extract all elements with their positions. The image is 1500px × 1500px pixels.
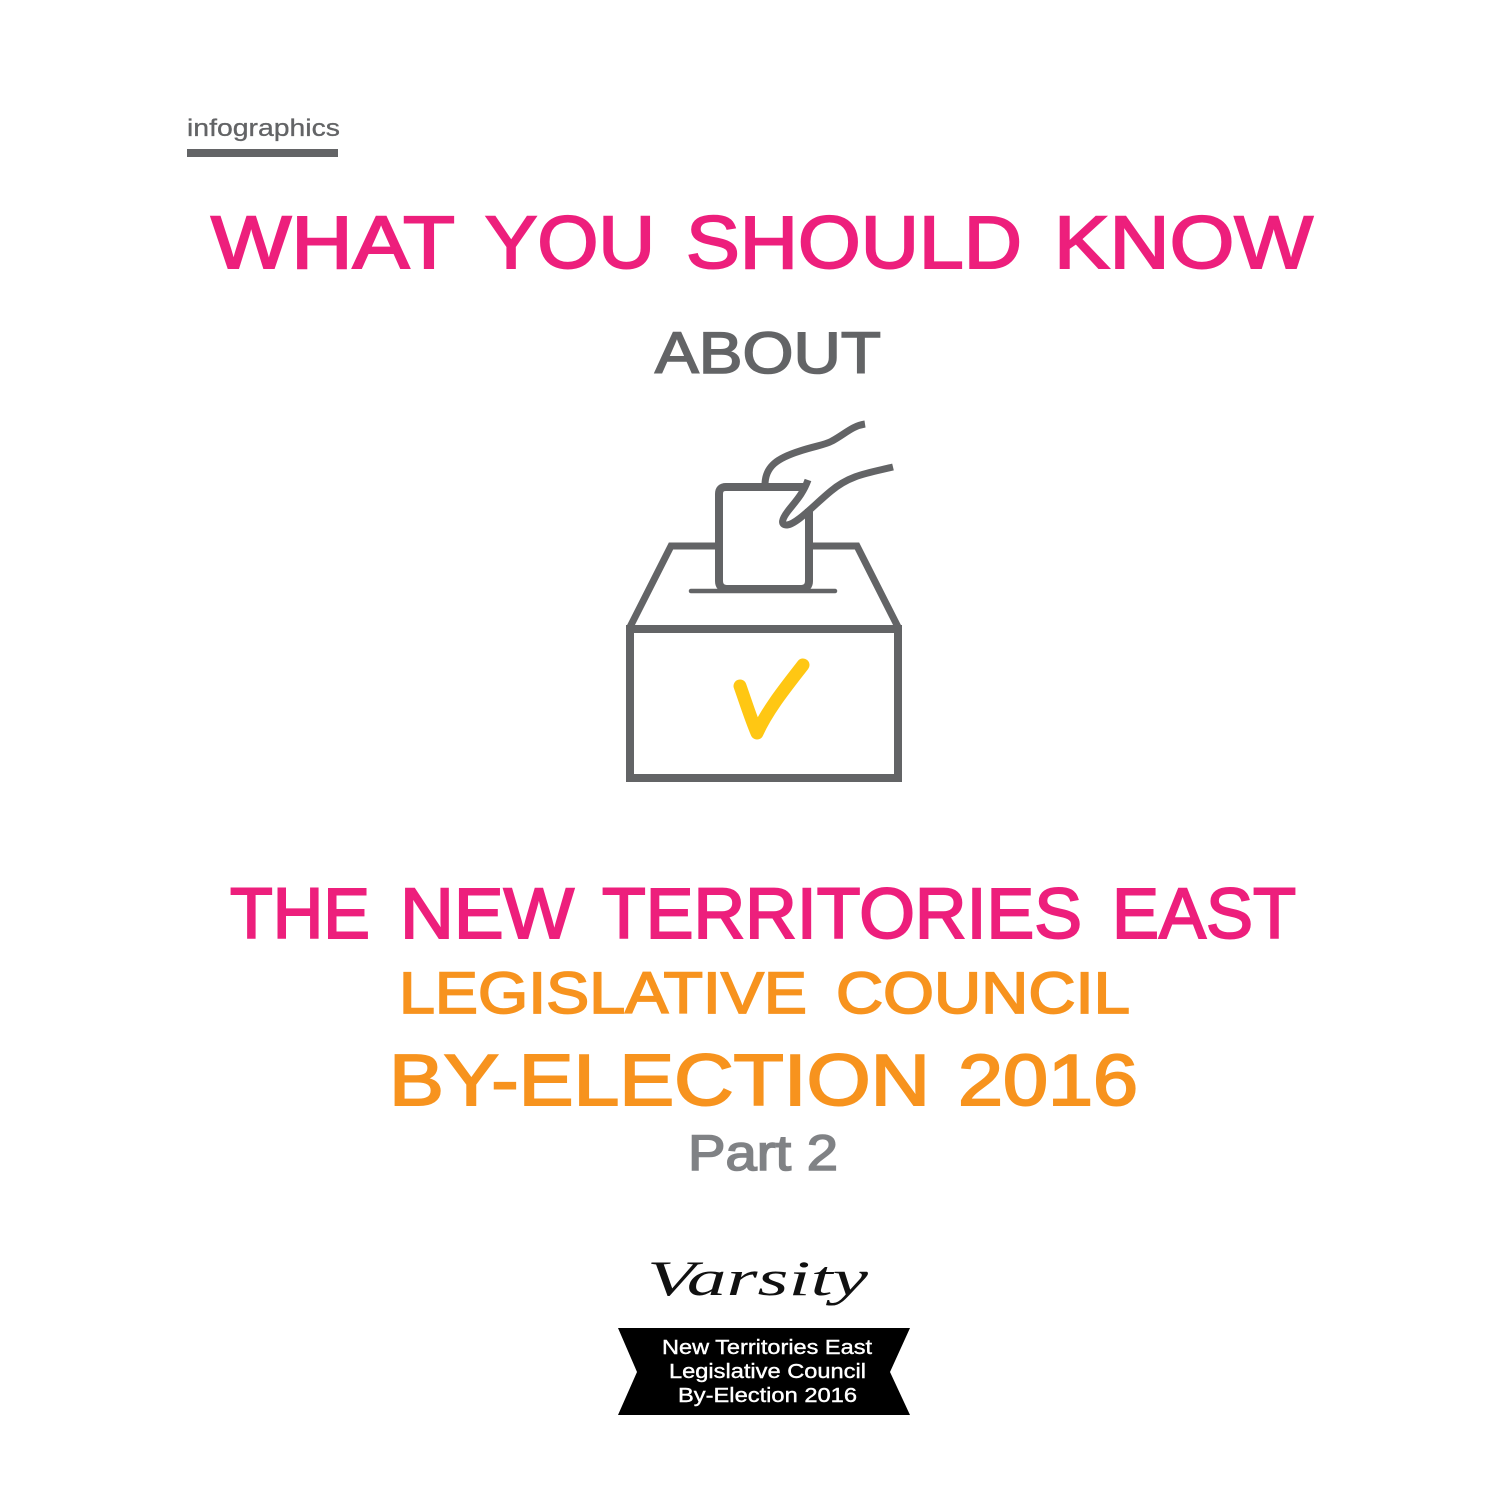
main heading: WHAT xyxy=(211,201,455,284)
heading: legislative council xyxy=(399,961,1130,1026)
logo: Varsity: Varsity xyxy=(647,1250,869,1306)
heading: the new territories east: THE xyxy=(230,875,370,954)
heading: the new territories east: NEW xyxy=(400,875,574,954)
slot xyxy=(691,589,835,593)
icon: yellow check mark xyxy=(740,665,803,733)
box lid xyxy=(630,546,898,627)
heading: the new territories east: EAST xyxy=(1112,875,1296,954)
hand xyxy=(765,424,893,525)
ballot paper xyxy=(719,487,809,589)
section tag: infographics xyxy=(187,115,340,157)
heading: by-election 2016 xyxy=(389,1041,1138,1121)
heading: part 2: Part 2 xyxy=(688,1125,838,1181)
ribbon banner: New Territories East xyxy=(662,1336,872,1359)
main heading: SHOULD xyxy=(686,201,1022,284)
ribbon banner xyxy=(618,1328,910,1415)
icon: ballot box with hand xyxy=(630,424,898,778)
heading: by-election 2016: BY-ELECTION xyxy=(389,1041,930,1121)
main heading xyxy=(211,201,1313,284)
heading: by-election 2016: 2016 xyxy=(958,1041,1138,1121)
heading: legislative council: LEGISLATIVE xyxy=(399,961,807,1026)
heading: the new territories east xyxy=(230,875,1296,954)
main heading: KNOW xyxy=(1054,201,1313,284)
ribbon banner: Legislative Council xyxy=(669,1360,866,1383)
ribbon banner: By-Election 2016 xyxy=(678,1384,857,1407)
section tag: infographics: infographics xyxy=(187,115,340,142)
heading: legislative council: COUNCIL xyxy=(836,961,1130,1026)
subheading: about: ABOUT xyxy=(655,321,881,386)
main heading: YOU xyxy=(485,201,655,284)
heading: the new territories east: TERRITORIES xyxy=(602,875,1082,954)
box body xyxy=(630,629,898,778)
